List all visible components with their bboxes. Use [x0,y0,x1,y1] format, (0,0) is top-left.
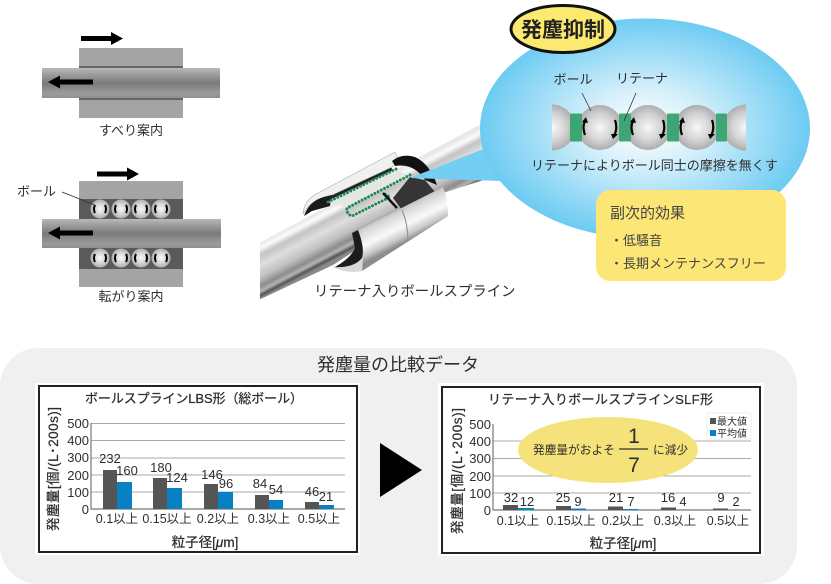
bar values: 4 [679,494,687,509]
y axis labels: 400 [469,434,491,449]
label: ball: ボール [553,72,593,87]
bar values: 96 [219,476,233,491]
panel: side effects [596,190,786,281]
shaft [42,68,220,98]
chart: SLF type [438,383,764,556]
panel title: 発塵量の比較データ [317,355,479,375]
bars: maximum [503,505,728,510]
front sleeve [358,187,448,271]
bar values: 124 [166,470,188,485]
y axis title: 発塵量[個/(L･200s)] [46,407,61,531]
y axis labels [469,417,491,518]
photo caption: リテーナ入りボールスプライン [314,283,515,300]
grid lines [91,424,345,492]
retainers [570,114,727,142]
housing black end [304,195,332,216]
y axis labels [67,416,89,517]
x axis labels: 0.5以上 [707,514,749,528]
arrow: comparison [380,443,422,497]
end ball left [552,104,570,150]
chart frame [438,383,764,556]
bar values: 180 [150,460,172,475]
y axis labels: 0 [82,502,89,517]
leader line: ball [62,192,95,205]
bar values: 46 [305,484,319,499]
sleeve dark end [335,230,363,267]
badge ellipse [511,6,615,52]
x axis labels: 0.2以上 [602,514,644,528]
chart title: リテーナ入りボールスプラインSLF形 [488,392,713,407]
label: sliding guide: すべり案内 [99,123,163,138]
y axis labels: 0 [484,503,491,518]
list item: maintenance free: ・長期メンテナンスフリー [610,256,766,271]
y axis labels: 300 [67,450,89,465]
x axis title: 粒子径[μm] [172,535,238,550]
label: rolling guide: 転がり案内 [98,289,164,304]
callout: reduced to one seventh: 発塵量がおよそ [533,443,615,457]
panel background [0,348,797,584]
callout pointer [410,148,500,181]
housing clearance lines [79,67,183,99]
shaft [42,219,221,248]
axes [91,423,345,509]
chart frame [35,383,360,555]
bubble ellipse [480,18,810,238]
callout bubble: dust suppression [480,18,810,238]
panel box [596,190,786,281]
badge text: 発塵抑制 [521,19,605,42]
photo: ball spline with retainer [260,124,483,299]
inner dark cavity [393,177,435,210]
legend: 最大値 [717,415,747,428]
x axis labels: 0.3以上 [248,512,290,526]
arrow: shaft direction [48,226,93,240]
x axis labels [96,512,340,526]
bar values: 21 [319,489,333,504]
callout: reduced to one seventh: 7 [628,454,640,477]
bar values: 12 [520,494,534,509]
x axis labels: 0.3以上 [654,514,696,528]
bars: maximum [103,470,319,509]
callout: reduced to one seventh [518,417,698,483]
bar values: 9 [574,494,582,509]
housing [79,48,183,118]
bar values: 146 [201,467,223,482]
bar values: 7 [627,494,635,509]
y axis labels: 100 [469,486,491,501]
bar values: 9 [717,490,725,505]
caption: リテーナによりボール同士の摩擦を無くす [531,158,778,173]
x axis labels [497,514,749,528]
bars: average [117,482,334,509]
dark line under shell [330,169,392,198]
bar values: 232 [99,451,121,466]
legend: 平均値 [717,427,747,440]
black end ring [392,156,437,185]
x axis title: 粒子径[μm] [590,536,656,551]
end ball right [727,104,746,150]
arrow: housing direction [97,168,139,180]
ball and retainer diagram [552,72,746,150]
chart title: ボールスプラインLBS形（総ボール） [85,391,303,406]
callout: reduced to one seventh: 1 [628,425,640,448]
y axis labels: 500 [469,417,491,432]
legend [707,413,751,440]
list item: low noise: ・低騒音 [610,233,662,248]
y axis labels: 300 [469,451,491,466]
leader lines [582,93,636,121]
chart: LBS type [35,383,360,555]
y axis labels: 200 [67,468,89,483]
x axis labels: 0.15以上 [142,512,192,526]
sleeve lip [332,258,363,272]
x axis labels: 0.1以上 [96,512,138,526]
y axis title: 発塵量[個/(L･200s)] [450,408,465,534]
y axis labels: 400 [67,433,89,448]
retainer surface [328,170,412,208]
bar values: 84 [253,476,267,491]
shaft [260,124,483,299]
dark raceway [79,199,183,269]
panel: dust comparison [0,348,797,584]
bar values: 2 [732,494,740,509]
x axis labels: 0.2以上 [197,512,239,526]
bar values: 54 [269,482,283,497]
grid lines [493,441,751,493]
sleeve seam [402,210,408,241]
axes [493,424,751,510]
bar values: 160 [116,463,138,478]
arrow: housing direction [81,32,123,45]
bar values: 32 [504,490,518,505]
diagram: rolling guide [17,168,221,304]
bar values [504,490,740,509]
y axis labels: 100 [67,485,89,500]
bar values: 16 [661,490,675,505]
ball rotation marks [94,205,167,262]
rear housing shell [303,152,399,214]
x axis labels: 0.5以上 [298,512,340,526]
x axis labels: 0.1以上 [497,514,539,528]
sleeve cut edge [383,193,397,208]
panel heading: 副次的効果 [610,205,685,222]
housing [79,181,183,287]
diagram: sliding guide [42,32,220,138]
x axis labels: 0.15以上 [546,514,596,528]
y axis labels: 200 [469,469,491,484]
label: ball: ボール [17,184,56,199]
bar values: 25 [556,490,570,505]
ball tracks: green dots [328,168,410,216]
badge: dust suppression [511,6,615,52]
arrow: shaft direction [48,76,93,88]
bar values: 21 [609,490,623,505]
rotation arrows [582,117,715,139]
balls [578,105,720,150]
y axis labels: 500 [67,416,89,431]
bar values [99,451,333,504]
label: retainer: リテーナ [616,71,668,86]
callout: reduced to one seventh: に減少 [653,443,688,457]
balls [90,200,170,268]
bars: average [518,508,638,510]
